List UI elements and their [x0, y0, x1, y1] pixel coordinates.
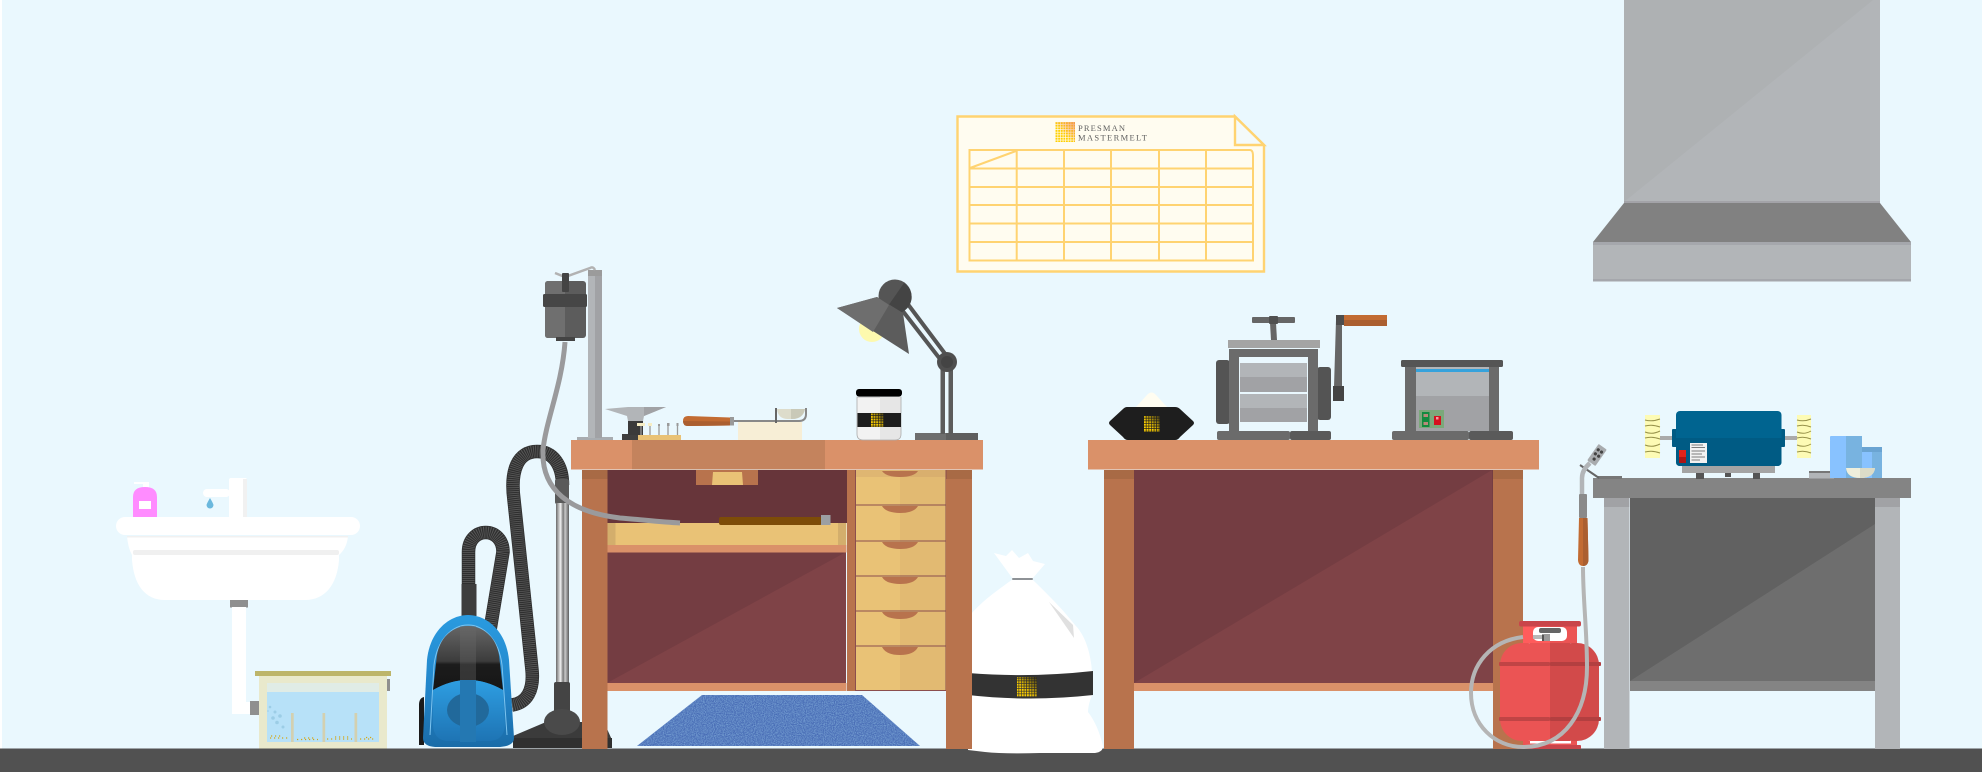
drawer stack — [856, 470, 946, 690]
polishing motor — [1645, 411, 1811, 479]
small jar — [1862, 447, 1882, 478]
file handle on shelf — [719, 515, 830, 525]
crucible pouch — [1109, 392, 1194, 440]
settling tank — [255, 671, 391, 749]
torch stand — [1580, 465, 1622, 479]
bowl — [1846, 468, 1875, 478]
chart grid — [970, 150, 1253, 260]
vacuum wand — [554, 479, 570, 714]
bench top — [1593, 478, 1911, 498]
lamp head — [878, 280, 912, 312]
mill rollers — [1240, 363, 1307, 422]
pin block — [637, 423, 681, 440]
bench legs — [582, 470, 972, 749]
pendant motor stand — [543, 267, 613, 440]
bench back panel — [1134, 470, 1493, 691]
vacuum hose — [468, 452, 562, 705]
anvil — [605, 407, 666, 440]
poster logo: MASTERMELT — [1078, 132, 1148, 142]
workbench left — [571, 440, 983, 749]
gas bottle — [1499, 621, 1601, 749]
workbench right — [1088, 440, 1539, 749]
dividers — [291, 713, 357, 742]
poster logo — [1055, 122, 1148, 142]
piercing saw and bench block — [683, 408, 806, 440]
floor — [0, 748, 1982, 772]
poster logo: PRESMAN — [1078, 123, 1125, 133]
ultrasonic cleaner — [1392, 360, 1513, 440]
flexible shaft — [543, 342, 680, 523]
polishing compound pots — [1809, 436, 1882, 478]
tap — [203, 478, 247, 518]
basin — [116, 517, 360, 600]
pendant motor — [543, 273, 587, 341]
bench top — [571, 440, 983, 470]
jar — [856, 389, 902, 440]
vacuum cleaner — [419, 452, 612, 748]
bench top — [1088, 440, 1539, 470]
rug — [637, 695, 920, 746]
control panel — [1419, 410, 1444, 428]
motor label — [1690, 443, 1707, 463]
bench back panel — [607, 470, 847, 683]
soap dispenser — [133, 482, 157, 517]
vacuum body — [419, 584, 514, 747]
shelf drawer — [608, 523, 846, 691]
under-top pull — [696, 470, 758, 485]
rolling mill — [1216, 315, 1387, 440]
desk lamp — [837, 280, 978, 440]
water drop — [206, 498, 214, 508]
sandbag — [968, 550, 1103, 753]
large jar — [1830, 436, 1862, 478]
polishing mops — [1645, 415, 1811, 458]
lamp bulb — [859, 316, 885, 342]
floor head — [513, 709, 612, 748]
gas valve — [1533, 627, 1567, 641]
bench legs — [1104, 470, 1523, 749]
mill crank — [1333, 315, 1387, 401]
extractor hood — [1593, 0, 1911, 282]
gold sediment — [270, 736, 375, 740]
bench legs — [1604, 498, 1900, 749]
wall chart poster — [958, 116, 1264, 272]
torch — [1578, 444, 1607, 566]
drain pipe — [230, 600, 259, 715]
gas hose and torch — [1471, 444, 1622, 747]
left bench right leg cap over bag — [946, 479, 972, 749]
steel bench — [1593, 478, 1911, 749]
bubbles — [267, 706, 284, 728]
sink — [116, 478, 360, 715]
